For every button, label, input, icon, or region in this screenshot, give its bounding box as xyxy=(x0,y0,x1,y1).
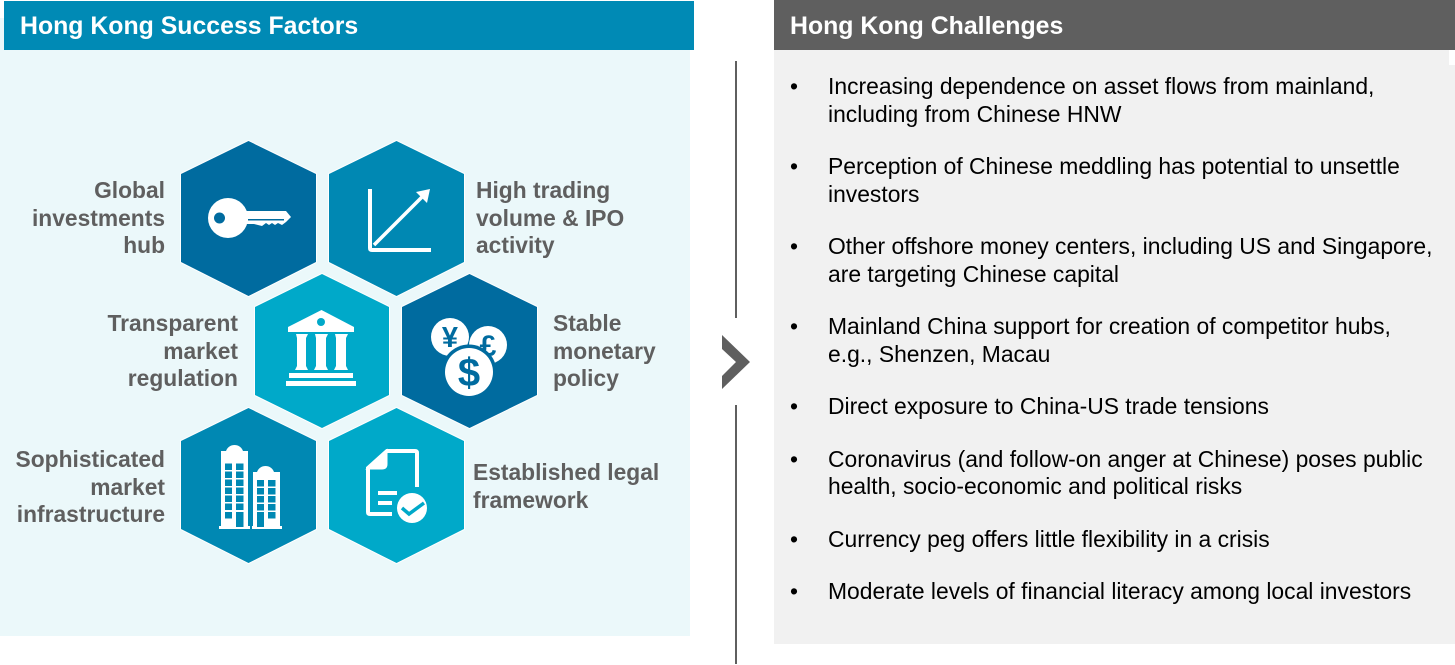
bullet: financial literacy: Moderate levels of financial literacy among local investors xyxy=(828,578,1411,604)
bullet: mainland asset flows: including from Chinese HNW xyxy=(828,101,1122,127)
heading: success factors xyxy=(4,1,694,50)
label: stable monetary policy: monetary xyxy=(553,338,656,364)
bullet: coronavirus: Coronavirus (and follow-on anger at Chinese) poses public xyxy=(828,446,1423,472)
heading: challenges: Hong Kong Challenges xyxy=(790,13,1063,40)
label: global investments hub: investments xyxy=(32,205,165,231)
icon: currency coins: ¥ xyxy=(442,322,458,354)
bullet list xyxy=(790,73,1432,604)
label: sophisticated market infrastructure: Sophisticated xyxy=(16,446,165,472)
label: sophisticated market infrastructure: infrastructure xyxy=(17,501,165,527)
label: high trading volume: volume & IPO xyxy=(476,205,624,231)
bullet: offshore money centers: • xyxy=(790,233,798,259)
heading: success factors: Hong Kong Success Factors xyxy=(20,13,358,40)
bullet: Chinese meddling: • xyxy=(790,153,798,179)
bullet: mainland asset flows: Increasing dependence on asset flows from mainland, xyxy=(828,73,1374,99)
bullet: mainland asset flows: • xyxy=(790,73,798,99)
bullet: currency peg: Currency peg offers little flexibility in a crisis xyxy=(828,526,1270,552)
icon: bank building xyxy=(286,310,356,386)
icon: rising chart xyxy=(370,189,431,250)
panel background xyxy=(0,18,690,636)
label: established legal framework: Established legal xyxy=(473,459,659,485)
label: stable monetary policy: Stable xyxy=(553,310,621,336)
bullet: competitor hubs: Mainland China support for creation of competitor hubs, xyxy=(828,313,1391,339)
bullet: Chinese meddling: investors xyxy=(828,181,919,207)
label: high trading volume: activity xyxy=(476,232,555,258)
label: global investments hub: Global xyxy=(94,177,165,203)
bullet: trade tensions: • xyxy=(790,393,798,419)
label: high trading volume: High trading xyxy=(476,177,610,203)
bullet: Chinese meddling: Perception of Chinese meddling has potential to unsettle xyxy=(828,153,1400,179)
hexagon: high trading volume xyxy=(329,141,624,296)
label: established legal framework: framework xyxy=(473,487,589,513)
hexagon: transparent market regulation xyxy=(108,274,389,428)
icon: currency coins xyxy=(431,318,507,400)
hexagon: sophisticated market infrastructure xyxy=(16,408,316,563)
bullet: offshore money centers: are targeting Chinese capital xyxy=(828,261,1119,287)
label: stable monetary policy: policy xyxy=(553,365,619,391)
bullet: competitor hubs: • xyxy=(790,313,798,339)
icon: key xyxy=(208,198,291,238)
bullet: trade tensions: Direct exposure to China-US trade tensions xyxy=(828,393,1269,419)
bullet: offshore money centers: Other offshore money centers, including US and Singapore, xyxy=(828,233,1432,259)
bullet: coronavirus: health, socio-economic and political risks xyxy=(828,473,1242,499)
icon: document with check xyxy=(368,451,427,523)
panel: challenges xyxy=(774,0,1455,644)
label: transparent market regulation: regulation xyxy=(128,365,238,391)
panel background xyxy=(774,50,1455,644)
icon: office towers xyxy=(219,445,282,529)
heading: challenges xyxy=(774,0,1455,50)
icon: currency coins: £ xyxy=(480,330,497,363)
bullet: currency peg: • xyxy=(790,526,798,552)
divider line xyxy=(735,61,737,664)
hexagon: global investments hub xyxy=(32,141,316,296)
icon: currency coins: $ xyxy=(458,351,480,395)
bullet: financial literacy: • xyxy=(790,578,798,604)
label: global investments hub: hub xyxy=(123,232,165,258)
arrow: chevron xyxy=(722,335,750,389)
bullet: competitor hubs: e.g., Shenzen, Macau xyxy=(828,341,1050,367)
bullet: coronavirus: • xyxy=(790,446,798,472)
hexagon: established legal framework xyxy=(329,408,659,563)
hexagon: stable monetary policy xyxy=(402,274,656,428)
label: sophisticated market infrastructure: market xyxy=(90,474,165,500)
panel: success factors xyxy=(0,1,694,636)
label: transparent market regulation: Transparent xyxy=(108,310,238,336)
label: transparent market regulation: market xyxy=(163,338,238,364)
